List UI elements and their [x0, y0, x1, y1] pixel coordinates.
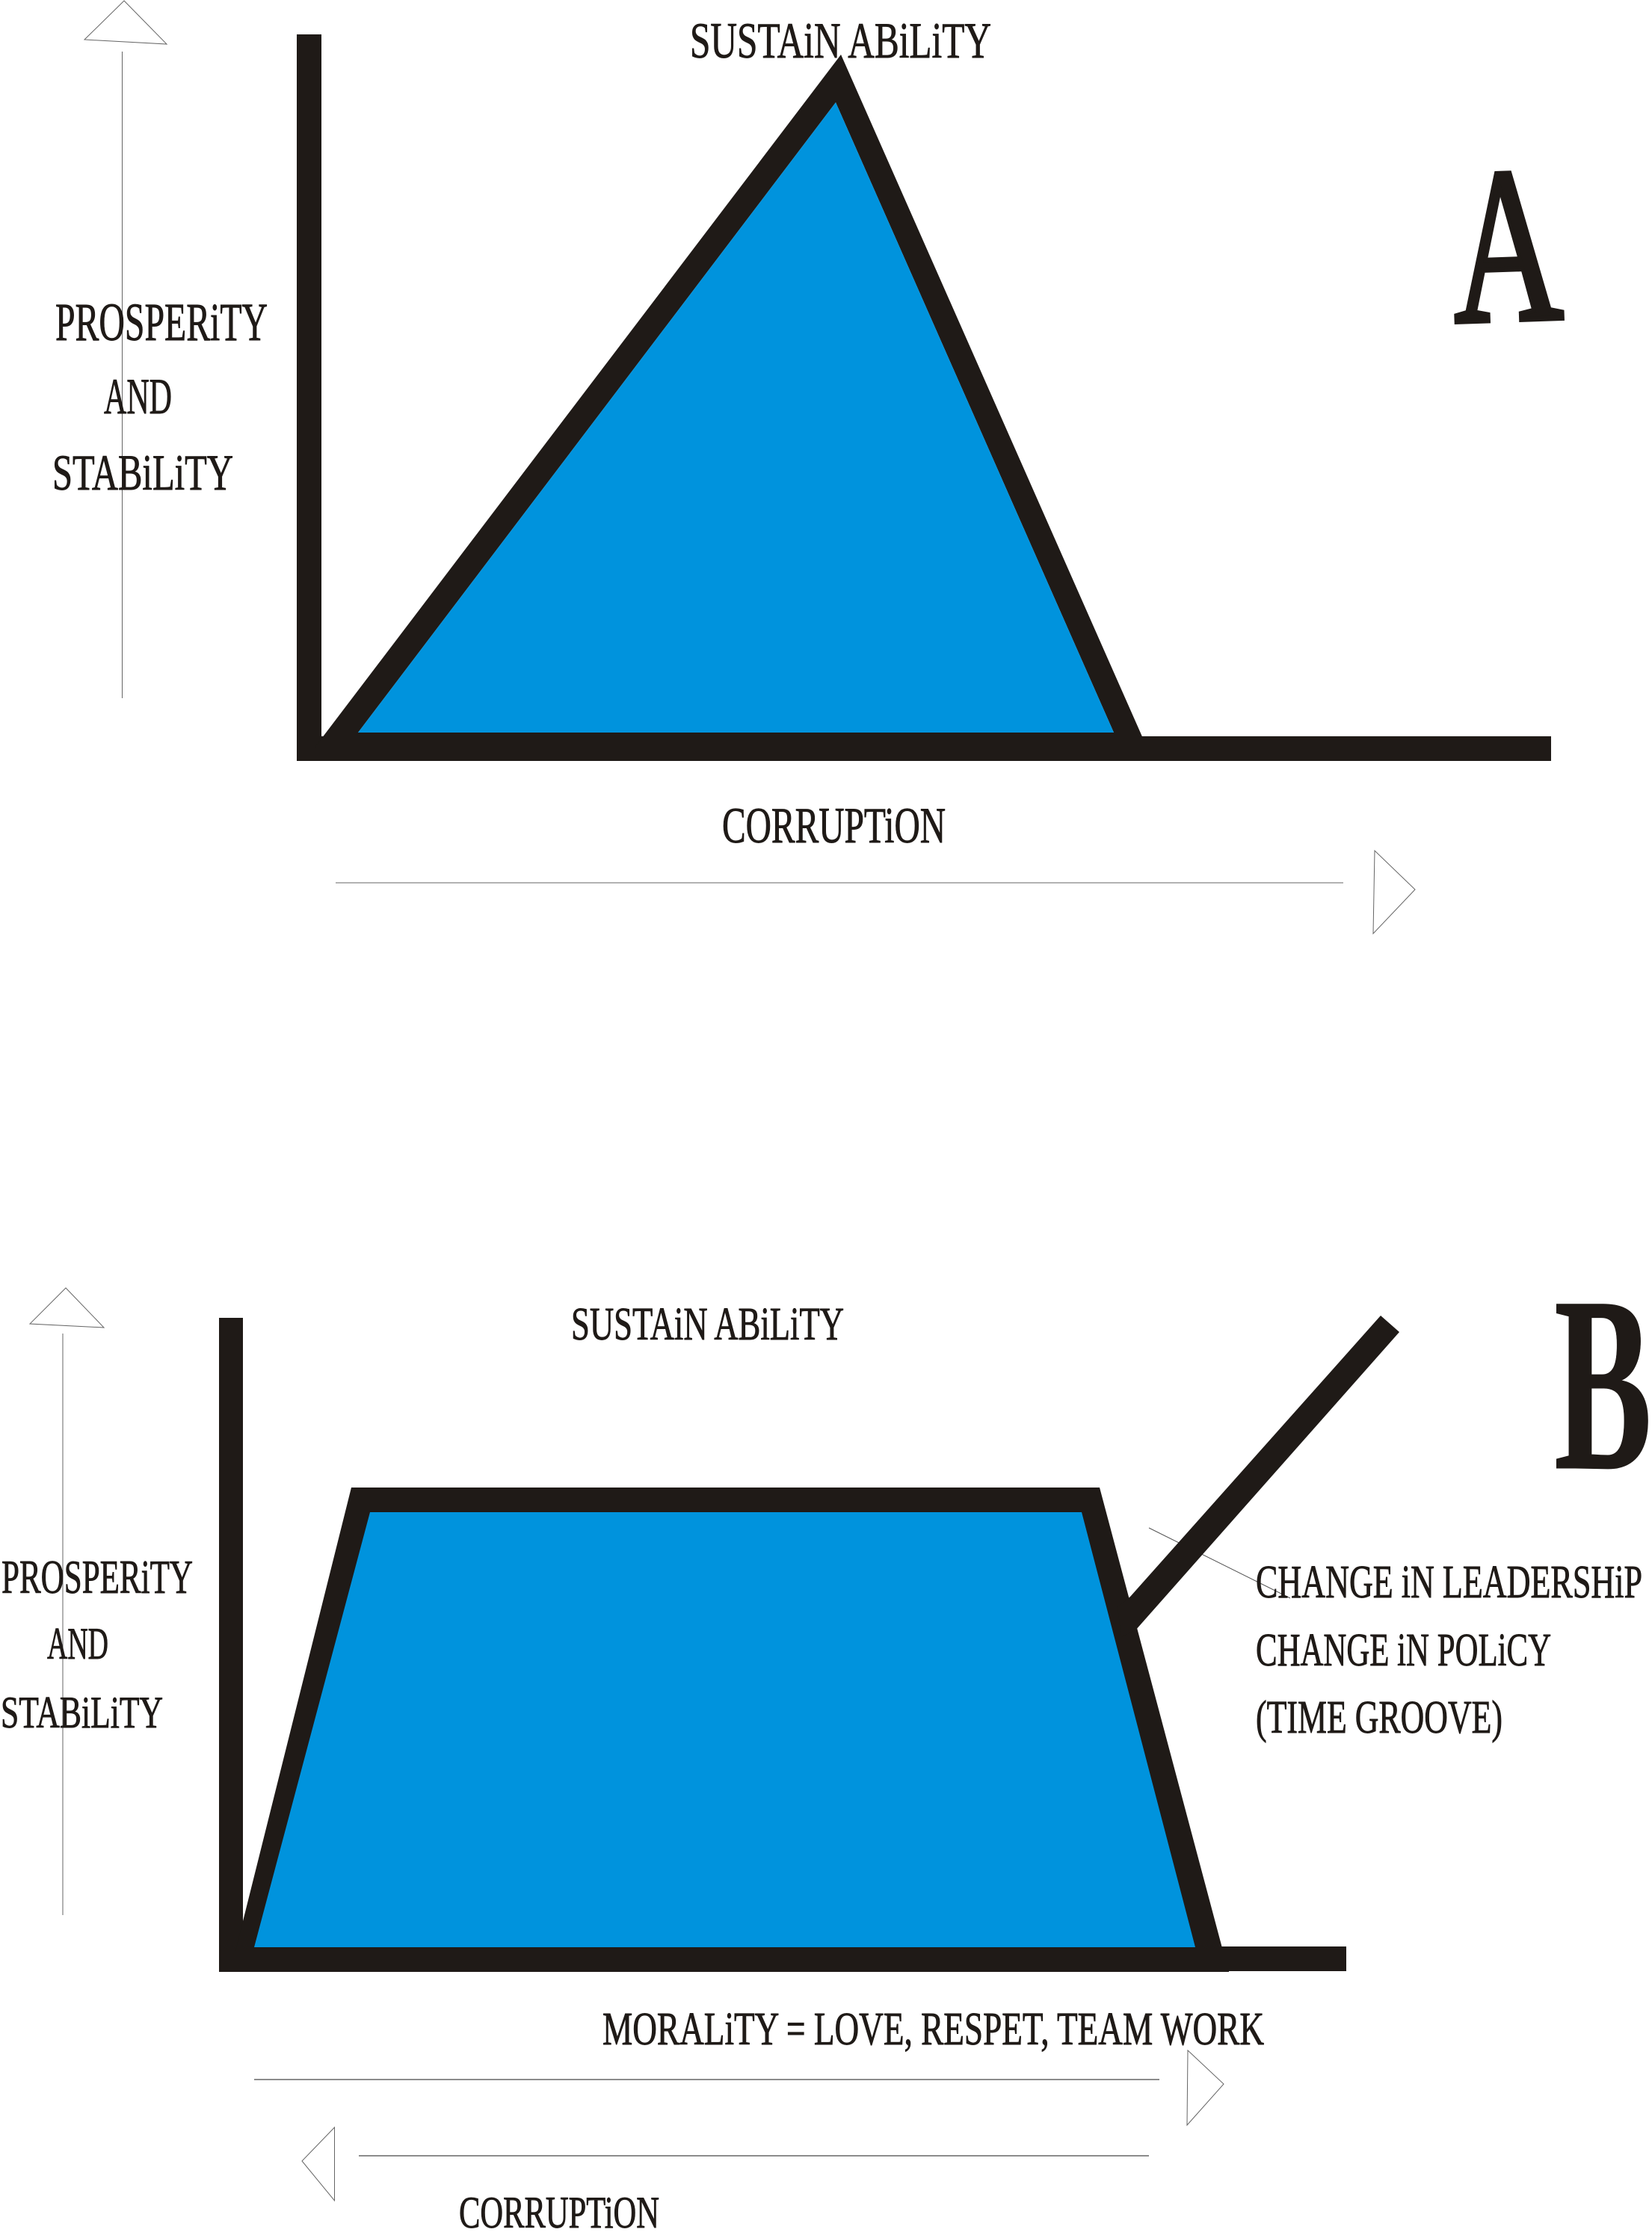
- label: prosperity and stability A: PROSPERiTY: [55, 292, 268, 352]
- axes A: [297, 34, 1551, 761]
- morality arrow: [254, 2050, 1224, 2125]
- label: sustainability A: SUSTAiN ABiLiTY: [690, 12, 991, 69]
- label: prosperity and stability B: AND: [47, 1619, 108, 1668]
- label: corruption A: CORRUPTiON: [722, 797, 946, 854]
- letter A: A: [1448, 121, 1565, 370]
- panel: diagram B: [1, 1245, 1652, 2237]
- callout text: change in leadership and policy: (TIME GROOVE): [1256, 1692, 1502, 1743]
- label: corruption B: CORRUPTiON: [459, 2188, 659, 2237]
- callout leader line: [1149, 1528, 1290, 1598]
- corruption arrow: [302, 2127, 1149, 2201]
- branch line: change in leadership: [1118, 1316, 1399, 1637]
- x-axis arrow A: [336, 851, 1415, 934]
- triangle: sustainability region A: [315, 55, 1144, 747]
- label: sustainability B: SUSTAiN ABiLiTY: [571, 1299, 844, 1350]
- label: prosperity and stability B: [1, 1550, 193, 1737]
- y-axis arrow A: [84, 1, 167, 698]
- panel: diagram A: [52, 1, 1565, 934]
- label: prosperity and stability A: AND: [104, 368, 172, 425]
- callout text: change in leadership and policy: [1256, 1557, 1642, 1743]
- axes B: [219, 1318, 1346, 1972]
- label: prosperity and stability B: PROSPERiTY: [1, 1550, 193, 1603]
- label: morality: MORALiTY = LOVE, RESPET, TEAM WORK: [602, 2004, 1264, 2055]
- label: prosperity and stability B: STABiLiTY: [1, 1688, 163, 1737]
- label: prosperity and stability A: STABiLiTY: [52, 444, 233, 501]
- label: prosperity and stability A: [52, 292, 268, 501]
- y-axis arrow B: [30, 1288, 104, 1915]
- trapezoid: sustainability region B: [235, 1488, 1222, 1951]
